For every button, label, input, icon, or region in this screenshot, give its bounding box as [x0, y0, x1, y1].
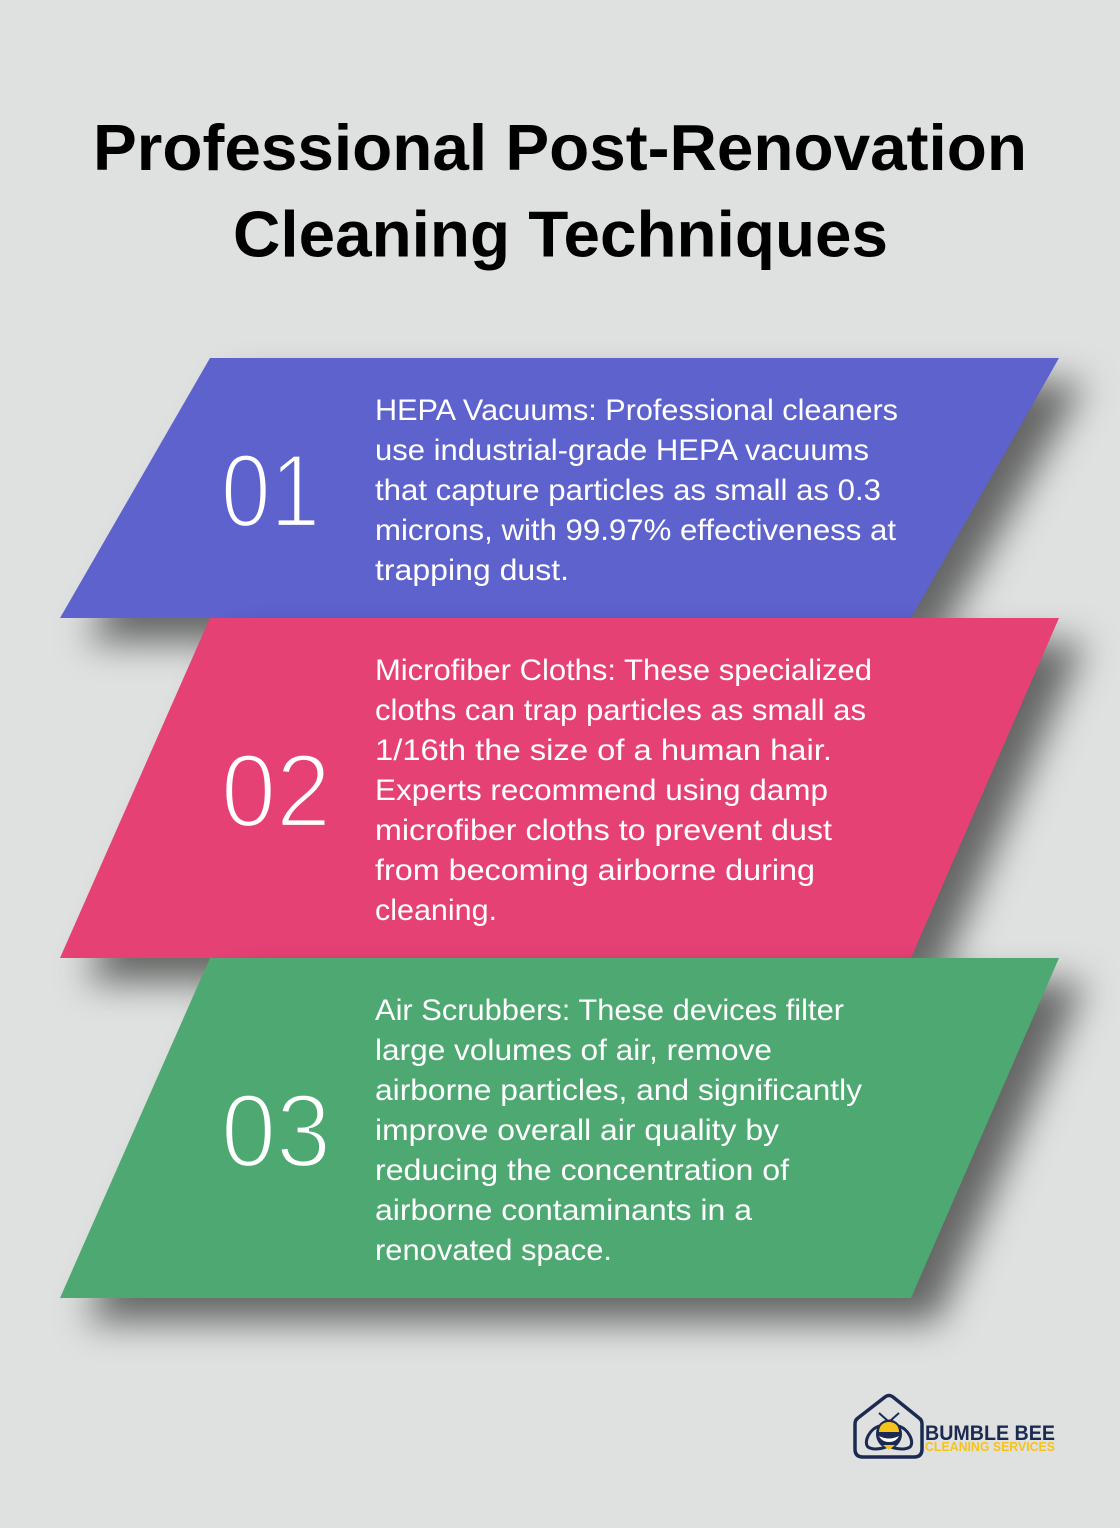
title	[93, 111, 1027, 270]
text: HEPA vacuums description: microns, with 99.97% effectiveness at	[375, 514, 897, 547]
title: Professional Post-Renovation	[93, 111, 1027, 184]
text: air scrubbers description: large volumes of air, remove	[375, 1034, 772, 1067]
text: air scrubbers description: Air Scrubbers: These devices filter	[375, 994, 844, 1027]
number 03: 03	[221, 1074, 331, 1190]
text: HEPA vacuums description: that capture particles as small as 0.3	[375, 474, 881, 507]
band: green parallelogram	[60, 958, 1059, 1298]
text: air scrubbers description: airborne particles, and significantly	[375, 1074, 862, 1107]
panel: 01 HEPA vacuums	[60, 358, 1085, 642]
text: HEPA vacuums description: trapping dust.	[375, 554, 569, 587]
text: microfiber cloths description: Experts recommend using damp	[375, 774, 828, 807]
text: HEPA vacuums description	[375, 394, 898, 587]
text: air scrubbers description: renovated space.	[375, 1234, 612, 1267]
tagline: CLEANING SERVICES	[925, 1440, 1055, 1454]
text: air scrubbers description: airborne contaminants in a	[375, 1194, 752, 1227]
text: HEPA vacuums description: HEPA Vacuums: Professional cleaners	[375, 394, 898, 427]
number 02: 02	[221, 734, 331, 850]
text: microfiber cloths description: cleaning.	[375, 894, 497, 927]
text: microfiber cloths description: 1/16th the size of a human hair.	[375, 734, 832, 767]
text: air scrubbers description	[375, 994, 862, 1267]
text: microfiber cloths description: cloths can trap particles as small as	[375, 694, 866, 727]
text: microfiber cloths description: from becoming airborne during	[375, 854, 815, 887]
panel: 02 microfiber cloths	[60, 618, 1085, 982]
text: HEPA vacuums description: use industrial-grade HEPA vacuums	[375, 434, 869, 467]
logo: Bumble Bee Cleaning Services	[855, 1396, 1055, 1457]
icon: house with bee	[855, 1396, 922, 1457]
text: microfiber cloths description: Microfiber Cloths: These specialized	[375, 654, 872, 687]
band: blue parallelogram	[60, 358, 1059, 618]
number 01: 01	[221, 434, 320, 550]
panel: 03 air scrubbers	[60, 958, 1085, 1322]
text: microfiber cloths description	[375, 654, 872, 927]
band: pink parallelogram	[60, 618, 1059, 958]
text: air scrubbers description: reducing the concentration of	[375, 1154, 790, 1187]
text: microfiber cloths description: microfiber cloths to prevent dust	[375, 814, 833, 847]
wordmark: BUMBLE BEE	[925, 1421, 1055, 1445]
title: Cleaning Techniques	[233, 198, 888, 270]
text: air scrubbers description: improve overall air quality by	[375, 1114, 779, 1147]
